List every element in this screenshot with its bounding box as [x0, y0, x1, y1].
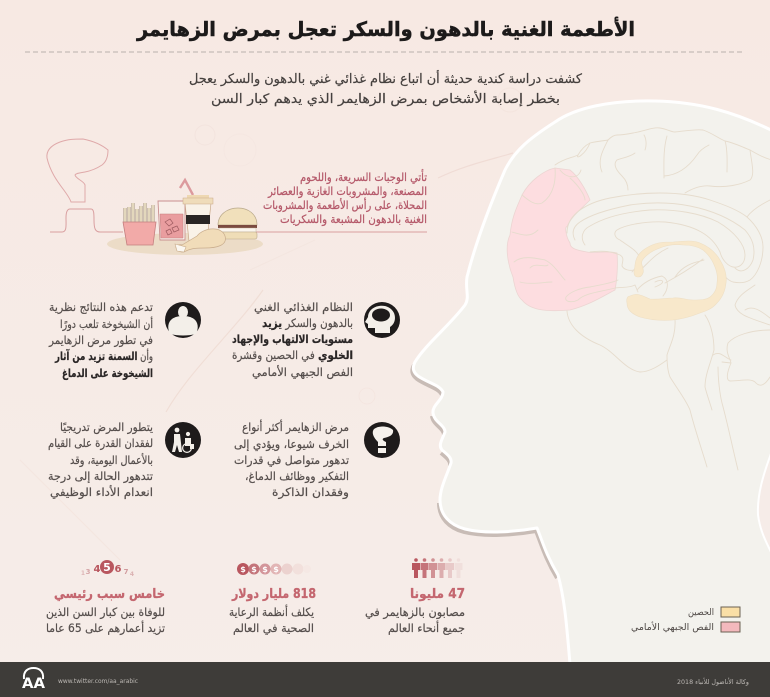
stat: fifth cause: تزيد أعمارهم على 65 عاما — [46, 620, 165, 636]
icon: number arc: 6 — [115, 564, 122, 575]
icon: number arc — [81, 560, 134, 578]
stat: fifth cause: خامس سبب رئيسي — [54, 587, 165, 602]
head silhouette with brain — [412, 101, 770, 664]
footer: www.twitter.com/aa_arabic — [58, 678, 138, 685]
block: obesity — [48, 300, 201, 381]
logo — [22, 668, 45, 692]
text: تتدهور الحالة إلى درجة — [48, 469, 153, 484]
block: progression — [48, 420, 201, 500]
icon: dollar coins: $ — [240, 565, 246, 574]
food text: الغنية بالدهون المشبعة والسكريات — [280, 212, 427, 227]
text: الخلوي في الحصين وقشرة — [232, 348, 353, 363]
food text: تأتي الوجبات السريعة، واللحوم — [300, 169, 427, 185]
title: الأطعمة الغنية بالدهون والسكر تعجل بمرض الزهايمر — [136, 16, 635, 41]
block: brain inflammation — [232, 300, 400, 380]
food text — [263, 169, 427, 227]
icon: dollar coins: $ — [262, 565, 268, 574]
head shape — [413, 101, 770, 664]
icon: cup with straw — [180, 180, 213, 241]
text: الشيخوخة على الدماغ — [62, 366, 153, 381]
text: انعدام الأداء الوظيفي — [50, 485, 153, 500]
block: dementia — [234, 419, 400, 500]
text: الفص الجبهي الأمامي — [252, 365, 353, 380]
icon: obese person — [165, 302, 201, 338]
icon: number arc: 7 — [124, 568, 129, 576]
stat: 818 billion dollars: 818 مليار دولار — [231, 587, 316, 602]
brain: cortex and inner lines — [512, 128, 770, 470]
text: تدهور متواصل في قدرات — [234, 453, 349, 468]
icon: number arc: 4 — [94, 564, 101, 575]
text — [232, 300, 353, 380]
stat: fifth cause — [46, 560, 165, 636]
brain: prefrontal cortex — [507, 168, 617, 311]
text — [48, 420, 153, 500]
text: تدعم هذه النتائج نظرية — [49, 300, 153, 315]
legend: الفص الجبهي الأمامي — [631, 621, 714, 633]
food panel — [47, 139, 427, 255]
icon: head with brain — [364, 302, 400, 338]
stat: 818 billion dollars — [229, 563, 316, 635]
icon: people — [412, 558, 462, 578]
text: مستويات الالتهاب والإجهاد — [232, 332, 353, 347]
footer — [0, 662, 770, 697]
text: الخرف شيوعا، ويؤدي إلى — [234, 437, 349, 452]
food illustration — [107, 180, 263, 255]
text: لفقدان القدرة على القيام — [48, 436, 153, 451]
stat: 818 billion dollars: يكلف أنظمة الرعاية — [229, 604, 314, 620]
stat: 47 million — [365, 558, 465, 635]
stat: fifth cause: للوفاة بين كبار السن الذين — [46, 605, 165, 620]
icon: number arc: 3 — [86, 568, 91, 576]
text: وأن السمنة تزيد من آثار — [54, 348, 153, 364]
icon: number arc: 1 — [81, 570, 85, 577]
stat: 818 billion dollars: الصحية في العالم — [233, 621, 314, 635]
icon: dollar coins: $ — [251, 565, 257, 574]
text — [234, 419, 349, 500]
icon: fries — [123, 203, 156, 245]
neck notch — [758, 451, 770, 554]
text — [48, 300, 153, 381]
brain: hippocampus — [627, 241, 726, 320]
text: بالأعمال اليومية، وقد — [70, 453, 153, 468]
legend: الحصين — [688, 608, 714, 618]
text: أن الشيخوخة تلعب دورًا — [60, 316, 153, 332]
intro text: بخطر إصابة الأشخاص بمرض الزهايمر الذي يدهم كبار السن — [211, 90, 560, 107]
footer: وكالة الأناضول للأنباء 2018 — [677, 677, 749, 686]
icon: chicken leg — [175, 229, 225, 252]
text: في تطور مرض الزهايمر — [48, 333, 153, 348]
legend — [631, 607, 740, 633]
icon: question mark — [364, 422, 400, 458]
food text: المحلاة، على رأس الأطعمة والمشروبات — [263, 197, 427, 213]
icon: number arc: 5 — [103, 561, 111, 574]
intro text: كشفت دراسة كندية حديثة أن اتباع نظام غذائي غني بالدهون والسكر يعجل — [189, 70, 583, 87]
text: مرض الزهايمر أكثر أنواع — [242, 419, 349, 435]
icon: soft drink glass — [158, 201, 185, 240]
head outline shadow — [412, 365, 557, 578]
stat: 47 million: مصابون بالزهايمر في — [365, 605, 465, 620]
text: بالدهون والسكر يزيد — [262, 316, 353, 331]
food text: المصنعة، والمشروبات الغازية والعصائر — [267, 184, 427, 199]
icon: number arc: 4 — [130, 571, 134, 578]
text: التفكير ووظائف الدماغ، — [245, 469, 349, 484]
intro text — [189, 70, 583, 107]
logo: AA — [22, 676, 45, 692]
icon: burger — [218, 208, 257, 239]
icon: dollar coins: $ — [273, 565, 279, 574]
icon: wheelchair and carer — [165, 422, 201, 458]
stat: 47 million: 47 مليونا — [410, 587, 465, 602]
text: وفقدان الذاكرة — [272, 485, 349, 500]
question mark outline and baseline — [47, 139, 427, 232]
text: يتطور المرض تدريجيًا — [60, 420, 153, 435]
stat: 47 million: جميع أنحاء العالم — [388, 620, 465, 635]
icon: dollar coins — [237, 563, 311, 575]
text: النظام الغذائي الغني — [254, 300, 353, 314]
